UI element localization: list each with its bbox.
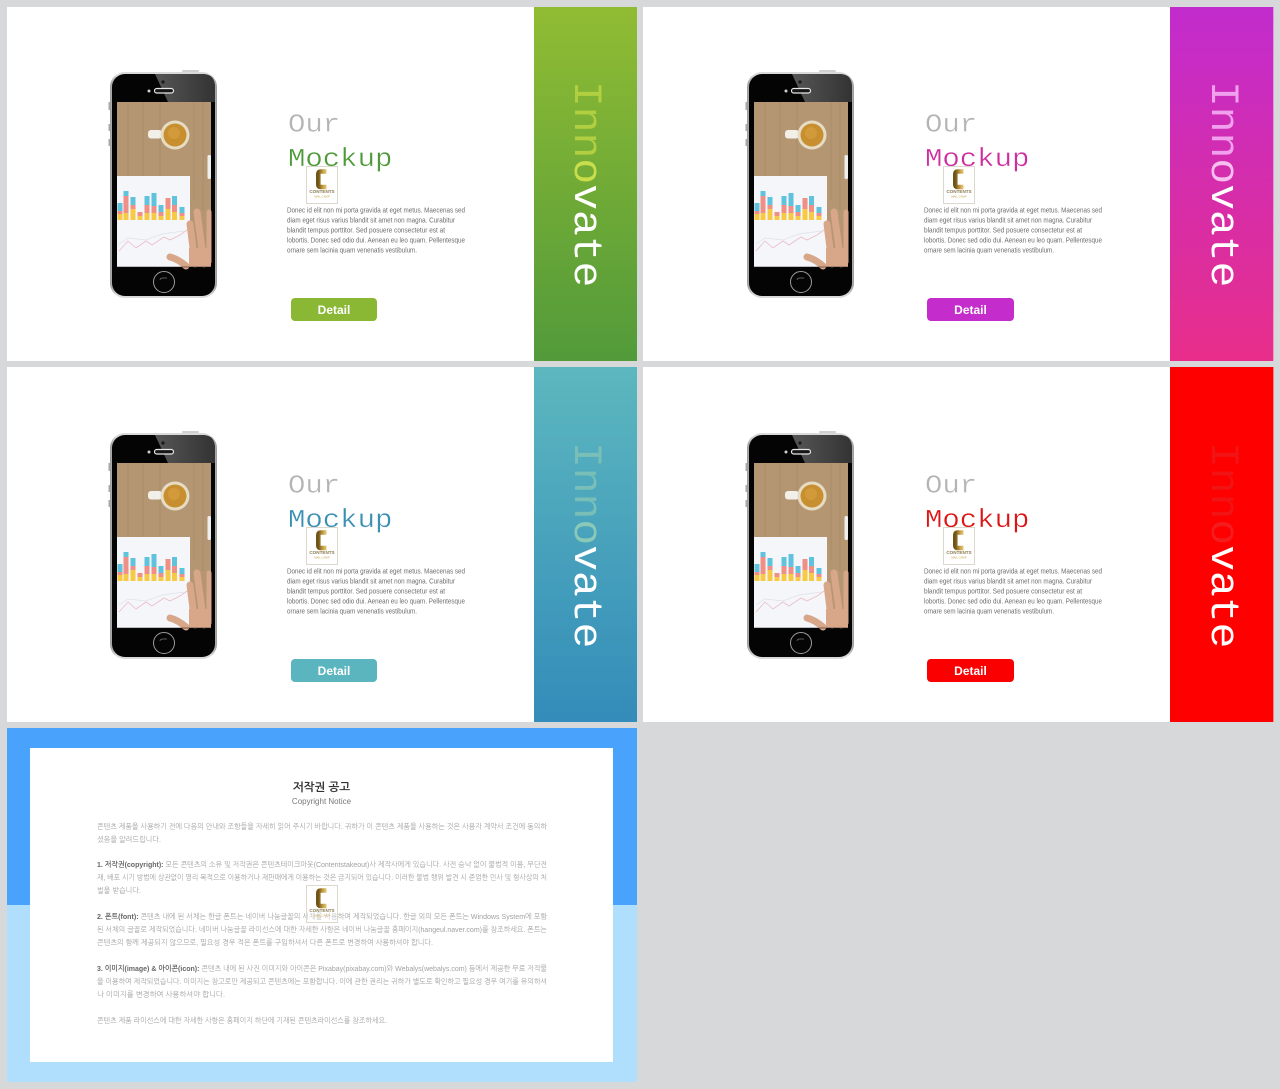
slide background	[643, 7, 1274, 361]
notice body text: 벌을 받습니다.	[97, 886, 141, 895]
notice body text: 나 이미지를 변경하여 사용하셔야 합니다.	[97, 990, 225, 999]
body text: lobortis. Donec sed odio dui. Aenean eu leo quam. Pellentesque	[924, 596, 1102, 606]
heading: Mockup: Mockup	[288, 145, 392, 174]
vertical word: Innovate: Inn o vate	[1200, 81, 1244, 287]
body text: blandit tempus porttitor. Sed posuere consectetur est at	[924, 226, 1082, 234]
body text: Donec id elit non mi porta gravida at eget metus. Maecenas sed	[924, 206, 1102, 214]
watermark logo: MAIL CAMP	[951, 194, 967, 198]
notice body text: 된 서체의 글꼴로 제작되었습니다. 네이버 나눔글꼴 라이선스에 대한 자세한 사항은 네이버 나눔글꼴 홈페이지(hangeul.naver.com)를 참조하세요. 폰트는	[97, 925, 547, 934]
side band: red	[1170, 367, 1274, 722]
heading: Our: Our	[288, 472, 340, 501]
notice body text: 을 이용하여 제작되었습니다. 이미지는 참고로만 제공되고 콘텐츠에는 포함합니다. 이에 관한 권리는 귀하가 별도로 확인하고 필요성 경우 여기를 유의하셔	[97, 977, 547, 986]
notice body text: 2. 폰트(font): 콘텐츠 내에 된 서체는 한글 폰트는 네이버 나눔글꼴의 서체를 사용하여 제작되었습니다. 한글 외의 모든 폰트는 Windows System에 포함	[97, 912, 548, 921]
body text	[924, 566, 1102, 616]
body text	[287, 566, 465, 616]
watermark logo: CONTENTS	[309, 908, 335, 913]
heading: Mockup: Mockup	[925, 506, 1029, 535]
body text: lobortis. Donec sed odio dui. Aenean eu leo quam. Pellentesque	[287, 596, 465, 606]
heading: Mockup: Mockup	[925, 145, 1029, 174]
side band: green	[534, 7, 637, 361]
button: Detail: Detail	[954, 303, 987, 317]
watermark logo: MAIL CAMP	[951, 556, 967, 560]
panel: green mockup slide	[7, 7, 637, 361]
vertical word: Innovate: Inn o vate	[1200, 442, 1244, 648]
body text: Donec id elit non mi porta gravida at eget metus. Maecenas sed	[924, 566, 1102, 576]
vertical word: Innovate: Inn o vate	[563, 81, 607, 287]
background band: light blue	[7, 905, 637, 1082]
slide background	[7, 367, 637, 722]
side band: teal	[534, 367, 637, 722]
side band: magenta	[1170, 7, 1274, 361]
slide background	[7, 7, 637, 361]
body text	[924, 206, 1102, 254]
button: Detail	[291, 659, 377, 682]
body text: diam eget risus varius blandit sit amet non magna. Curabitur	[287, 216, 455, 224]
background band: blue	[7, 728, 637, 905]
notice body text	[97, 822, 548, 1025]
body text: lobortis. Donec sed odio dui. Aenean eu leo quam. Pellentesque	[924, 236, 1102, 244]
slide background	[643, 367, 1274, 722]
button: Detail	[291, 298, 377, 321]
watermark logo: MAIL CAMP	[314, 194, 330, 198]
heading: copyright notice Korean: 저작권 공고	[293, 781, 350, 794]
button: Detail: Detail	[318, 303, 350, 317]
notice body text: 1. 저작권(copyright): 모든 콘텐츠의 소유 및 저작권은 콘텐츠테이크아웃(Contentstakeout)사 제작사에게 있습니다. 사전 승낙 없이 불법적 이용, 무단전	[97, 860, 547, 869]
watermark logo	[306, 886, 338, 922]
heading: Our: Our	[925, 111, 977, 140]
watermark logo: CONTENTS	[309, 189, 335, 194]
button: Detail: Detail	[318, 664, 350, 678]
watermark logo	[306, 166, 338, 204]
notice card	[30, 748, 613, 1062]
notice body text: 콘텐츠의 함께 제공되지 않으므로, 필요성 경우 적은 폰트를 구입하셔서 다른 폰트로 변경하여 사용하셔야 합니다.	[97, 938, 433, 947]
button: Detail: Detail	[954, 664, 987, 678]
body text: ornare sem lacinia quam venenatis vestibulum.	[287, 606, 417, 616]
icon: phone mockup	[746, 70, 854, 298]
vertical word: Innovate: Inn o vate	[563, 442, 607, 648]
body text: Donec id elit non mi porta gravida at eget metus. Maecenas sed	[287, 206, 465, 214]
body text: blandit tempus porttitor. Sed posuere consectetur est at	[287, 226, 445, 234]
watermark logo: CONTENTS	[309, 550, 335, 555]
icon: phone mockup	[108, 431, 217, 659]
subheading: Copyright Notice: Copyright Notice	[292, 797, 352, 806]
panel: magenta mockup slide	[643, 7, 1274, 361]
notice body text: 3. 이미지(image) & 아이콘(icon): 콘텐츠 내에 된 사진 이미지와 아이콘은 Pixabay(pixabay.com)와 Webalys(webalys.com) 등에서 제공한 무료 저작물	[97, 964, 547, 973]
watermark logo: CONTENTS	[946, 550, 972, 555]
heading: Our: Our	[288, 111, 340, 140]
panel: copyright notice	[7, 728, 637, 1082]
watermark logo: MAIL CAMP	[314, 914, 330, 918]
body text: ornare sem lacinia quam venenatis vestibulum.	[924, 606, 1054, 616]
body text: diam eget risus varius blandit sit amet non magna. Curabitur	[287, 576, 455, 586]
button: Detail	[927, 298, 1014, 321]
body text: lobortis. Donec sed odio dui. Aenean eu leo quam. Pellentesque	[287, 236, 465, 244]
notice body text: 셨음을 알려드립니다.	[97, 835, 161, 844]
panel: red mockup slide	[643, 367, 1274, 722]
body text: diam eget risus varius blandit sit amet non magna. Curabitur	[924, 576, 1092, 586]
watermark logo: MAIL CAMP	[314, 556, 330, 560]
icon: phone mockup	[746, 431, 854, 659]
notice body text: 콘텐츠 제품을 사용하기 전에 다음의 안내와 조항들을 자세히 읽어 주시기 바랍니다. 귀하가 이 콘텐츠 제품을 사용하는 것은 사용자 계약서 조건에 동의하	[97, 822, 548, 831]
body text	[287, 206, 465, 254]
watermark logo	[944, 166, 974, 204]
watermark logo	[944, 528, 974, 564]
icon: phone mockup	[108, 70, 217, 298]
heading: Mockup: Mockup	[288, 506, 392, 535]
notice body text: 콘텐츠 제품 라이선스에 대한 자세한 사항은 홈페이지 하단에 기재된 콘텐츠라이선스를 참조하세요.	[97, 1016, 387, 1025]
heading: Our: Our	[925, 472, 977, 501]
body text: blandit tempus porttitor. Sed posuere consectetur est at	[287, 586, 445, 596]
notice body text: 재, 배포 시기 방법에 상관없이 영리 목적으로 이용하거나 재판매에게 이용하는 것은 금지되어 있습니다. 이러한 불법 행위 발견 시 준엄한 민사 및 형사상의 처	[97, 873, 547, 882]
panel: teal mockup slide	[7, 367, 637, 722]
body text: diam eget risus varius blandit sit amet non magna. Curabitur	[924, 216, 1092, 224]
body text: ornare sem lacinia quam venenatis vestibulum.	[924, 246, 1054, 254]
body text: ornare sem lacinia quam venenatis vestibulum.	[287, 246, 417, 254]
watermark logo	[306, 528, 338, 564]
watermark logo: CONTENTS	[946, 189, 972, 194]
body text: blandit tempus porttitor. Sed posuere consectetur est at	[924, 586, 1082, 596]
button: Detail	[927, 659, 1014, 682]
body text: Donec id elit non mi porta gravida at eget metus. Maecenas sed	[287, 566, 465, 576]
